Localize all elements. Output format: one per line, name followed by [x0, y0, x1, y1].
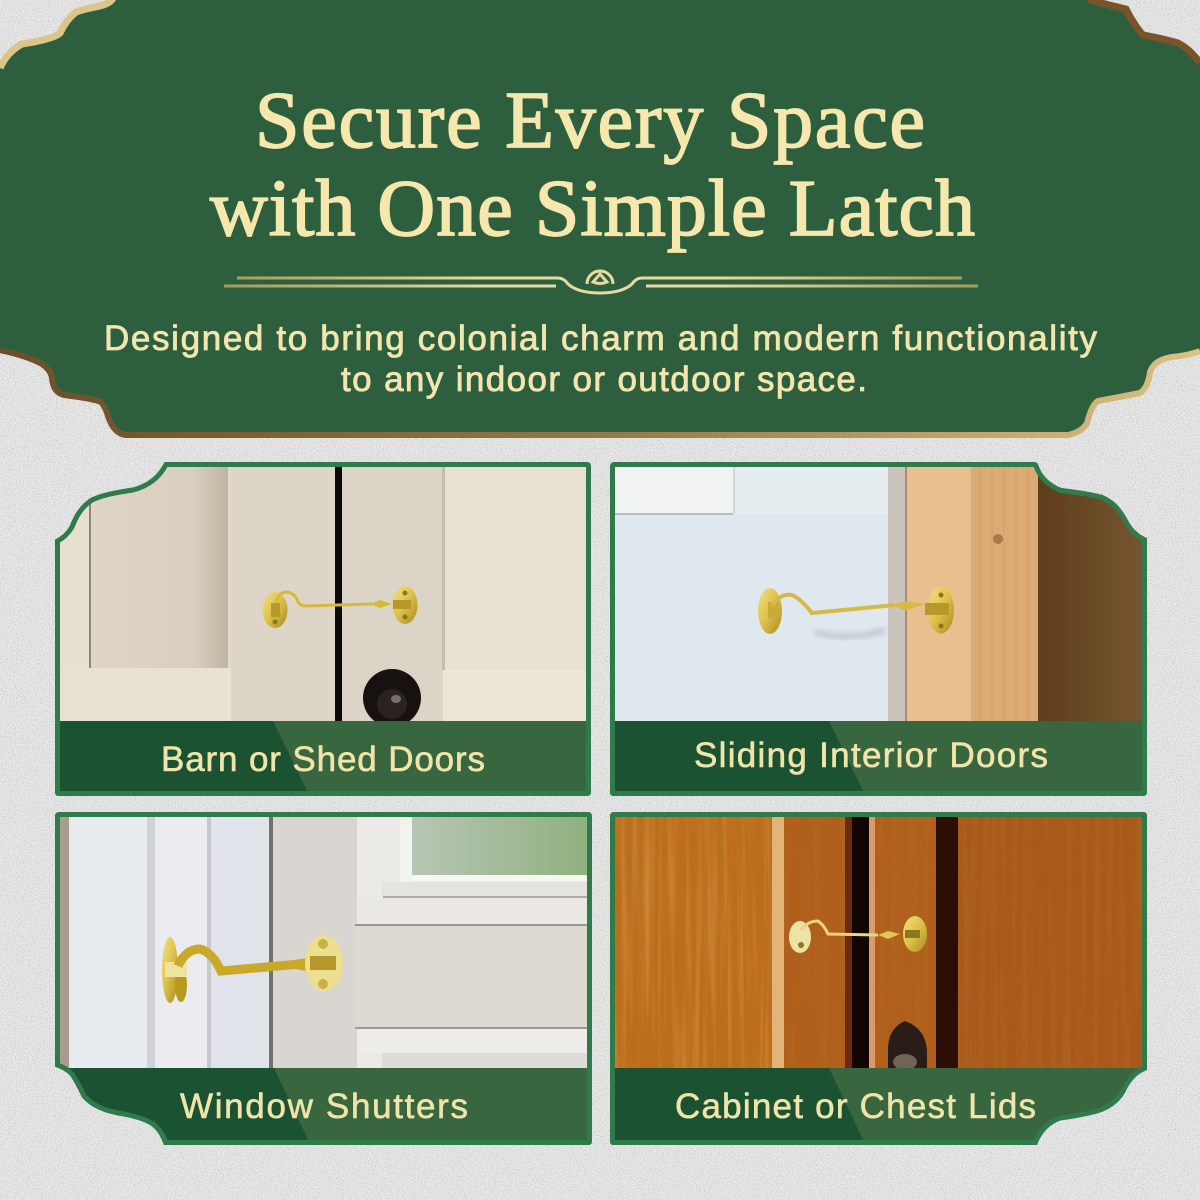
title — [210, 77, 975, 253]
banner edge: top right bronze — [1088, 0, 1200, 63]
ornamental divider — [224, 271, 978, 293]
label band — [610, 721, 1150, 797]
label: Sliding Interior Doors — [694, 736, 1048, 775]
label: Window Shutters — [180, 1087, 468, 1126]
banner edge: bottom bronze to gold — [0, 350, 1200, 435]
photo: cream barn door — [55, 462, 595, 797]
panel border — [612, 464, 1144, 794]
label: Cabinet or Chest Lids — [675, 1087, 1036, 1126]
door handle — [888, 1021, 927, 1070]
panel: header banner — [0, 0, 1200, 435]
banner fill — [0, 0, 1200, 435]
subtitle: to any indoor or outdoor space. — [341, 360, 867, 399]
subtitle — [104, 319, 1098, 399]
photo: white shutter and window — [55, 812, 595, 1146]
photo: orange wood cabinet — [610, 812, 1150, 1146]
panel: sliding interior doors — [610, 462, 1150, 797]
label: Barn or Shed Doors — [161, 740, 485, 779]
panel: cabinet or chest lids — [610, 812, 1150, 1146]
panel: window shutters — [55, 812, 595, 1146]
panel border — [58, 464, 588, 794]
subtitle: Designed to bring colonial charm and modern functionality — [104, 319, 1098, 358]
brass hook latch — [789, 916, 927, 953]
title: Secure Every Space — [255, 77, 925, 165]
photo: white door and timber frame — [610, 462, 1150, 797]
label band — [55, 1068, 595, 1146]
brass hook latch — [262, 586, 418, 628]
door knob — [363, 669, 421, 721]
label band — [610, 1068, 1150, 1146]
panel: barn or shed doors — [55, 462, 595, 797]
label band — [55, 721, 595, 797]
panel border — [58, 814, 590, 1142]
panel border — [612, 814, 1144, 1142]
title: with One Simple Latch — [210, 165, 975, 253]
banner edge: top left gold — [0, 0, 114, 68]
brass hook latch — [162, 935, 343, 1003]
brass hook latch — [758, 586, 954, 637]
